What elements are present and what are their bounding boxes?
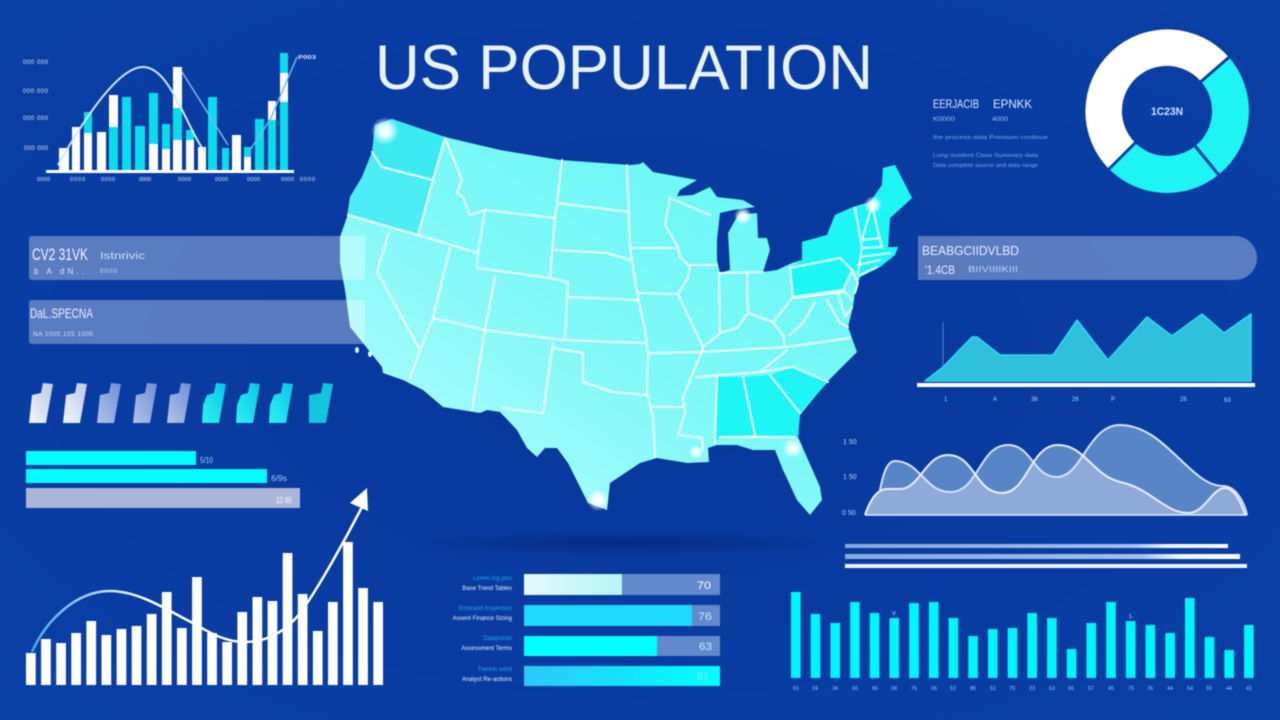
x axis labels: 0000 — [247, 177, 260, 183]
row 3 track — [524, 636, 720, 656]
y labels: 1 50 — [843, 439, 857, 446]
bar 3 — [26, 488, 300, 508]
icon 2 — [63, 383, 87, 423]
row 3 value: 63 — [699, 641, 712, 653]
x labels: 56 — [852, 686, 858, 692]
cyan bars — [84, 53, 288, 172]
segment: cyan right — [1195, 57, 1249, 175]
saturated states — [348, 119, 912, 443]
row labels: Lorem ing pics — [473, 576, 512, 582]
chart: bottom-right cyan bars — [791, 592, 1254, 692]
channel islands — [355, 347, 359, 353]
x labels: 76 — [1147, 686, 1153, 692]
panel: left stat one — [29, 236, 365, 280]
x labels: 66 — [872, 686, 878, 692]
x labels: 63 — [1224, 398, 1231, 404]
x labels: 54 — [1187, 686, 1193, 692]
wave B line — [865, 445, 1245, 515]
x labels — [944, 397, 1231, 404]
x labels: 75 — [1128, 686, 1134, 692]
x labels: 44 — [1226, 686, 1232, 692]
stat heading: DaL.SPECNA — [30, 305, 93, 321]
icon 5 — [167, 383, 191, 423]
y axis labels: 000 000 — [24, 146, 49, 152]
title: US POPULATION — [375, 33, 873, 103]
sub two: 4000 — [992, 117, 1009, 123]
map landmass — [340, 119, 912, 515]
x labels: 36 — [1031, 397, 1038, 403]
x labels: 1. — [1129, 614, 1134, 620]
x labels: 26 — [1180, 397, 1187, 403]
line one — [845, 544, 1228, 548]
city glow: texas — [587, 489, 609, 511]
x labels: 45 — [1108, 686, 1114, 692]
row labels: Trennis word — [478, 667, 512, 673]
x labels: 08 — [891, 686, 897, 692]
bar 1 value: 5/10 — [200, 456, 213, 465]
US map — [340, 117, 912, 515]
x axis labels: 0000 — [178, 177, 191, 183]
row labels: Datapoints — [483, 636, 512, 642]
stat note: 0000 — [100, 269, 118, 275]
x labels: V — [892, 611, 896, 617]
row 1 value: 70 — [697, 580, 711, 592]
wave B area — [865, 445, 1245, 515]
stat label: Istnrivic — [100, 251, 145, 262]
row labels — [453, 576, 512, 683]
icon 9 — [309, 383, 333, 423]
donut chart — [1085, 29, 1249, 193]
row 2 track — [524, 605, 720, 626]
line three — [845, 564, 1247, 568]
growth curve — [32, 507, 362, 652]
heading: BEABGCIIDVLBD — [922, 243, 1019, 258]
horizontal progress bars — [26, 451, 300, 508]
x axis labels: 0000 — [101, 177, 115, 183]
axis guide — [942, 322, 944, 380]
row labels: Assent Finance Sizing — [453, 616, 512, 622]
wave overlap — [880, 457, 1244, 515]
secondary trend line — [182, 57, 297, 150]
bar 1 — [26, 451, 196, 465]
row labels: Assessment Terms — [461, 646, 512, 652]
wave A line — [880, 425, 1247, 515]
chart: right area chart — [917, 314, 1255, 404]
x axis labels: 0000 — [300, 177, 315, 183]
x labels: 70 — [1009, 686, 1015, 692]
row 1 track — [524, 574, 720, 595]
x labels: 57 — [1088, 686, 1094, 692]
icon 4 — [133, 383, 157, 423]
y axis labels: 000 000 — [23, 60, 49, 66]
row 2 value: 76 — [698, 611, 712, 623]
heading one: EERJACIB — [933, 97, 979, 111]
x labels: 53 — [1049, 686, 1055, 692]
x axis labels: P003 — [298, 55, 316, 61]
row labels: Analyst Re-actions — [462, 677, 512, 683]
stat sub-label: b A dN.. — [34, 267, 84, 276]
bar 2 value: 6/9s — [271, 474, 287, 483]
y labels: 1 50 — [843, 474, 857, 481]
segment gaps — [1106, 54, 1233, 178]
x axis labels — [37, 55, 316, 183]
bar 3 value: 12 65 — [276, 496, 292, 505]
city glow: boston — [864, 196, 882, 214]
x labels: A — [993, 397, 997, 403]
x labels: 34 — [832, 686, 838, 692]
row 4 fill — [524, 666, 720, 686]
x labels: 56 — [1068, 686, 1074, 692]
bar 2 — [26, 469, 267, 483]
city glow: new orleans — [689, 445, 703, 459]
chart: top-left combo bars and curve — [23, 53, 316, 183]
value: '1.4CB — [925, 263, 955, 277]
x labels: 80 — [970, 686, 976, 692]
state borders — [348, 138, 890, 457]
row labels: Embrand Inspection — [459, 606, 512, 612]
panel background — [29, 236, 365, 280]
x axis labels: 0000 — [281, 177, 294, 183]
row 1 fill — [524, 574, 622, 595]
icon row — [29, 383, 333, 423]
city glow: northwest — [371, 117, 399, 145]
x labels — [793, 611, 1252, 692]
y axis labels: 000 000 — [23, 116, 49, 122]
sub one: K0000 — [933, 117, 956, 123]
x labels: 24 — [812, 686, 818, 692]
arrow head — [350, 488, 368, 511]
body line two: Long resident Class Summary data — [933, 153, 1039, 159]
stat heading: CV2 31VK — [32, 245, 88, 264]
x axis labels: 0000 — [70, 177, 85, 183]
y axis labels: 000 000 — [23, 89, 49, 95]
x axis labels: 0000 — [139, 177, 151, 183]
baseline — [917, 383, 1255, 387]
x labels: 52 — [950, 686, 956, 692]
x labels: 44 — [1167, 686, 1173, 692]
panel: center horizontal bars — [453, 574, 720, 686]
body line three: Data complete source and data range — [933, 163, 1038, 169]
stacked thin lines — [845, 544, 1247, 568]
axis line — [46, 170, 294, 173]
chart: bottom-left white bars with growth arrow — [26, 488, 383, 685]
x labels: P — [1111, 397, 1115, 403]
panel: left stat two — [29, 300, 365, 344]
note: BIIVIIIIKIII — [968, 265, 1018, 274]
body line one: the process data Premium continue — [933, 135, 1048, 141]
bars — [791, 592, 1254, 678]
x labels: 61 — [793, 686, 799, 692]
panel background — [29, 300, 365, 344]
row 4 value: 91 — [697, 671, 709, 683]
x labels: 1 — [944, 397, 948, 403]
chart: right wave area — [842, 425, 1247, 517]
icon 3 — [97, 383, 121, 423]
legend text: top right — [933, 97, 1048, 169]
panel: right stat — [918, 236, 1257, 280]
row labels: Base Trend Tables — [462, 586, 512, 592]
x axis labels: 0000 — [37, 177, 50, 183]
trend curve — [58, 67, 205, 165]
panel background — [918, 236, 1257, 280]
row 3 fill — [524, 636, 657, 656]
heading two: EPNKK — [993, 97, 1032, 111]
center label: 1C23N — [1151, 106, 1183, 118]
segment: cyan bottom — [1109, 143, 1219, 193]
y axis labels — [23, 60, 49, 152]
x labels: 76 — [911, 686, 917, 692]
bars — [26, 542, 383, 685]
left foot of wave B — [865, 489, 887, 515]
x labels: 55 — [1206, 686, 1212, 692]
city glow: florida — [783, 438, 803, 458]
icon 6 — [202, 383, 226, 423]
icon 7 — [236, 383, 260, 423]
y labels: 0 50 — [842, 510, 856, 517]
x axis labels: 0000 — [215, 177, 228, 183]
icon 8 — [269, 383, 293, 423]
y labels — [842, 439, 857, 517]
x labels: 51 — [990, 686, 996, 692]
line two — [845, 554, 1240, 559]
area — [925, 314, 1251, 381]
segment: white — [1085, 29, 1229, 169]
row 2 fill — [524, 605, 692, 626]
x labels: 26 — [1072, 397, 1079, 403]
map ground shadow — [405, 530, 845, 556]
x labels: 23 — [1029, 686, 1035, 692]
city glow: lake michigan — [734, 207, 752, 225]
x labels: 41 — [1246, 686, 1252, 692]
stat note: NA 1005 105 1005 — [33, 331, 93, 338]
x labels: 05 — [931, 686, 937, 692]
wave baseline — [865, 514, 1247, 516]
icon 1 — [29, 383, 53, 423]
wave A area — [880, 425, 1247, 515]
white bars — [59, 67, 288, 172]
